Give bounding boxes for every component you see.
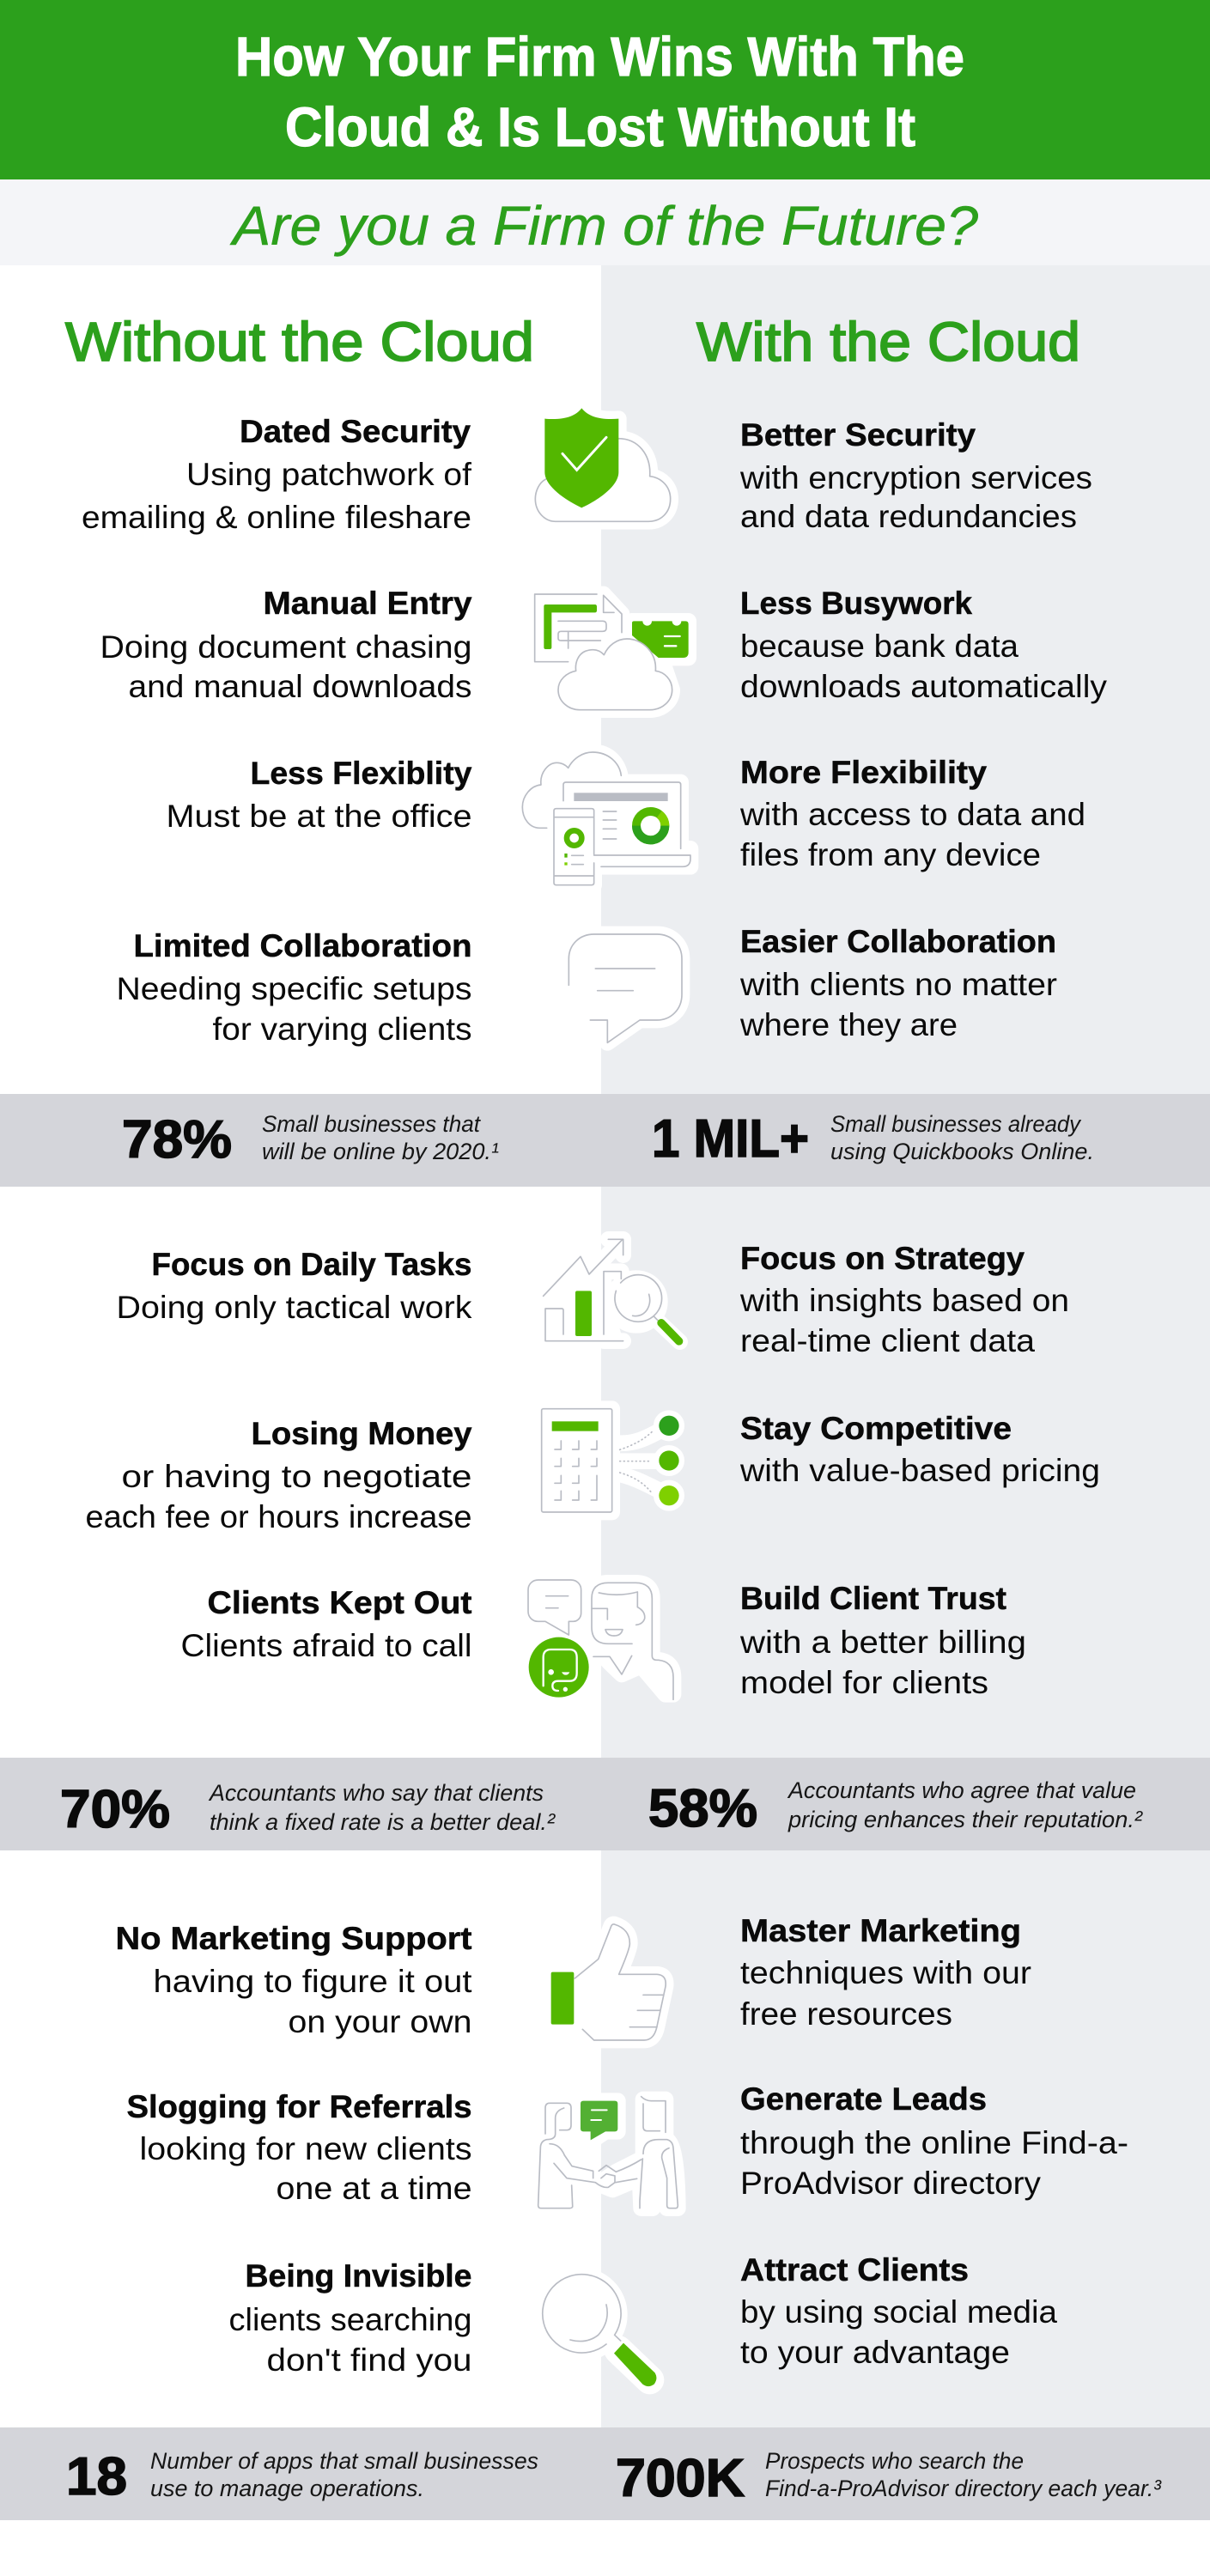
item: slogging for referrals: one at a time [277,2171,472,2206]
item: easier collaboration: Easier Collaboration [740,924,1056,959]
icon: shield and cloud [535,408,671,521]
item: focus on strategy: real-time client data [740,1323,1035,1358]
stat: 700K: 700K [616,2449,745,2508]
item: attract clients: Attract Clients [740,2252,969,2287]
stat: 18: 18 [66,2447,127,2506]
icon: documents and cloud [535,594,689,710]
item: more flexibility: More Flexibility [740,755,987,790]
item: dated security: Dated Security [240,414,471,449]
item: focus on daily tasks: Doing only tactical work [117,1290,472,1325]
title: Cloud & Is Lost Without It [285,96,915,158]
stat band 2 [0,1758,1210,1850]
icon: calculator and dots [542,1409,680,1512]
item: less flexibility [167,756,472,834]
stat: 58% [648,1777,1143,1838]
stat: 1 MIL+: using Quickbooks Online. [830,1139,1094,1164]
stat: 78%: 78% [122,1110,232,1170]
item: easier collaboration: with clients no matter [739,967,1057,1002]
item: easier collaboration [739,924,1057,1042]
item: losing money: or having to negotiate [122,1459,472,1494]
stat band 1 [0,1094,1210,1187]
item: being invisible: don't find you [266,2342,472,2378]
item: dated security: emailing & online fileshare [82,500,471,535]
item: master marketing: Master Marketing [740,1913,1021,1948]
item: attract clients: by using social media [740,2294,1057,2330]
item: generate leads: Generate Leads [740,2081,987,2117]
icon: client and support person [528,1580,673,1699]
item: better security: and data redundancies [740,499,1077,534]
item: stay competitive: Stay Competitive [740,1411,1012,1446]
item: dated security: Using patchwork of [186,457,472,492]
item: being invisible: Being Invisible [246,2258,472,2293]
heading: without the cloud: Without the Cloud [65,311,534,373]
right panel background [601,265,1210,2427]
item: slogging for referrals [127,2089,472,2206]
item: manual entry: Doing document chasing [100,629,472,665]
item: build client trust: with a better billing [739,1625,1026,1660]
stat: 18: use to manage operations. [150,2476,424,2501]
item: better security [739,417,1092,534]
item: clients kept out: Clients Kept Out [208,1585,472,1620]
stat band 3 [0,2427,1210,2520]
stat: 70%: 70% [60,1780,170,1839]
item: no marketing support: on your own [289,2004,472,2039]
item: attract clients [740,2252,1057,2370]
item: dated security [82,414,472,535]
item: focus on strategy [739,1241,1069,1358]
item: generate leads [740,2081,1128,2201]
item: less busywork [740,586,1108,704]
item: less busywork: because bank data [740,629,1018,664]
stat: 58%: 58% [648,1779,757,1838]
item: no marketing support: No Marketing Support [115,1921,472,1956]
item: being invisible [228,2258,472,2378]
item: losing money [86,1416,472,1534]
item: less busywork: Less Busywork [740,586,972,621]
stat: 1 MIL+: Small businesses already [830,1111,1081,1137]
item: losing money: Losing Money [251,1416,472,1451]
item: limited collaboration: for varying clients [213,1012,472,1047]
icon: thumbs up [551,1924,666,2040]
item: focus on strategy: Focus on Strategy [740,1241,1025,1276]
stat: 58%: pricing enhances their reputation.² [787,1807,1143,1832]
item: focus on daily tasks [117,1247,472,1325]
stat: 18: Number of apps that small businesses [150,2448,538,2474]
item: master marketing: techniques with our [740,1955,1031,1990]
item: manual entry: Manual Entry [263,586,472,621]
item: more flexibility [739,755,1085,872]
item: build client trust: model for clients [740,1665,988,1700]
stat: 70% [60,1780,556,1839]
item: less flexibility: Less Flexiblity [251,756,472,791]
item: limited collaboration [117,928,472,1047]
subtitle: Are you a Firm of the Future? [229,195,978,257]
item: stay competitive [739,1411,1100,1488]
icon: magnifying glass [541,2275,656,2386]
item: less flexibility: Must be at the office [167,799,472,834]
item: master marketing [740,1913,1031,2032]
stat: 78%: will be online by 2020.¹ [262,1139,499,1164]
item: clients kept out: Clients afraid to call [180,1628,472,1663]
stat: 78%: Small businesses that [262,1111,481,1137]
item: clients kept out [180,1585,472,1663]
item: slogging for referrals: Slogging for Referrals [127,2089,472,2124]
item: attract clients: to your advantage [740,2335,1010,2370]
item: better security: with encryption services [739,460,1092,495]
stat: 70%: Accountants who say that clients [208,1780,544,1806]
item: more flexibility: with access to data and [739,797,1085,832]
icon: devices and cloud [522,752,690,885]
item: limited collaboration: Limited Collaboration [134,928,472,963]
stat: 1 MIL+ [652,1109,1094,1169]
item: generate leads: through the online Find-a- [740,2125,1128,2160]
title banner [0,0,1210,179]
icon: handshake [538,2097,678,2208]
item: master marketing: free resources [740,1996,952,2032]
icon: chart and magnifier [544,1239,680,1342]
item: limited collaboration: Needing specific setups [117,971,472,1006]
stat: 78% [122,1110,499,1170]
item: no marketing support: having to figure it out [153,1964,472,1999]
title [235,26,964,158]
subtitle band [0,179,1210,265]
item: losing money: each fee or hours increase [86,1499,472,1534]
item: build client trust [739,1581,1026,1700]
title: How Your Firm Wins With The [235,26,964,88]
stat: 700K [616,2448,1162,2508]
item: manual entry [100,586,472,704]
item: generate leads: ProAdvisor directory [740,2166,1042,2201]
stat: 58%: Accountants who agree that value [787,1777,1136,1803]
heading: with the cloud: With the Cloud [696,311,1080,373]
item: focus on strategy: with insights based on [739,1283,1069,1318]
icon: speech bubble [569,934,682,1042]
item: more flexibility: files from any device [740,837,1041,872]
item: manual entry: and manual downloads [129,669,472,704]
item: slogging for referrals: looking for new clients [139,2131,472,2166]
item: build client trust: Build Client Trust [740,1581,1006,1616]
item: easier collaboration: where they are [739,1007,958,1042]
stat: 700K: Find-a-ProAdvisor directory each year.³ [765,2476,1162,2501]
stat: 700K: Prospects who search the [765,2448,1024,2474]
stat: 70%: think a fixed rate is a better deal.² [210,1809,556,1835]
item: better security: Better Security [740,417,976,453]
item: no marketing support [115,1921,472,2039]
item: less busywork: downloads automatically [740,669,1108,704]
stat: 18 [66,2447,538,2506]
stat: 1 MIL+: 1 MIL+ [652,1109,809,1169]
item: stay competitive: with value-based pricing [739,1453,1100,1488]
item: being invisible: clients searching [228,2302,472,2337]
item: focus on daily tasks: Focus on Daily Tasks [151,1247,472,1282]
